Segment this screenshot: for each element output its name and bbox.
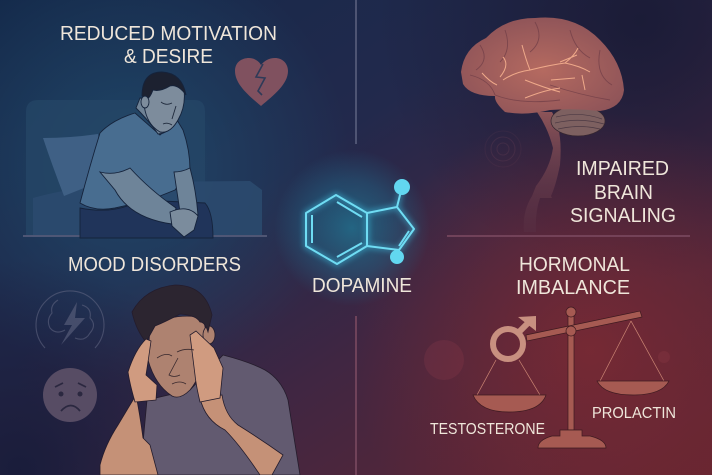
label: prolactin: PROLACTIN <box>592 405 676 422</box>
molecule glow <box>306 187 414 264</box>
panel: mood disorders <box>36 254 300 475</box>
illustration: sad man sitting <box>80 72 213 238</box>
label: testosterone: TESTOSTERONE <box>430 421 545 438</box>
central dopamine molecule <box>306 179 414 297</box>
illustration: brain stem <box>524 112 561 232</box>
illustration: brain <box>461 17 624 114</box>
heading: impaired brain signaling: BRAIN <box>594 182 653 204</box>
icon: broken heart <box>235 58 288 106</box>
molecule structure <box>306 179 414 264</box>
heading: hormonal imbalance <box>516 254 630 299</box>
heading: reduced motivation <box>60 23 277 68</box>
glowing nerve paths <box>482 45 590 98</box>
panel: hormonal imbalance <box>424 254 676 448</box>
heading: impaired brain signaling: SIGNALING <box>570 205 676 227</box>
heading: reduced motivation: & DESIRE <box>124 46 213 68</box>
faint glow discs <box>424 340 670 380</box>
illustration: bed <box>26 100 262 235</box>
heading: impaired brain signaling <box>570 158 676 227</box>
heading: reduced motivation: REDUCED MOTIVATION <box>60 23 277 45</box>
label: dopamine: DOPAMINE <box>312 275 412 297</box>
icon: sad face <box>43 368 97 422</box>
panel: impaired brain signaling <box>461 17 676 232</box>
illustration: scale <box>473 307 669 448</box>
illustration: cerebellum <box>551 106 605 136</box>
panel: reduced motivation and desire <box>26 23 288 238</box>
heading: hormonal imbalance: IMBALANCE <box>516 277 630 299</box>
heading: mood disorders: MOOD DISORDERS <box>68 254 241 276</box>
heading: hormonal imbalance: HORMONAL <box>519 254 630 276</box>
icon: male symbol <box>493 316 536 359</box>
heading: impaired brain signaling: IMPAIRED <box>576 158 669 180</box>
icon: brain with lightning <box>36 291 104 348</box>
faint ripple <box>485 131 521 167</box>
illustration: man holding head <box>100 285 300 475</box>
